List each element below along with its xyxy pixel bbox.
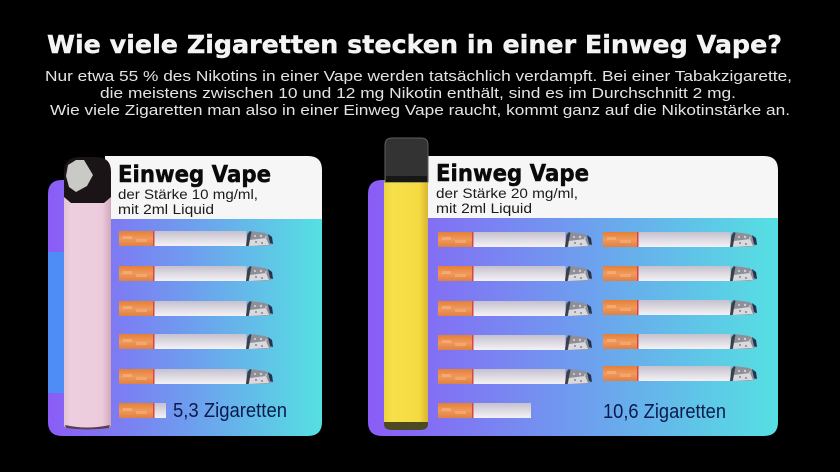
value label: 5,3 Zigaretten [173,400,287,422]
icon: yellow disposable vape [384,138,428,430]
panel subtitle: mit 2ml Liquid [118,202,214,217]
panel background [368,180,778,436]
panel subtitle: der Stärke 10 mg/ml, [118,187,258,202]
panel subtitle [436,186,578,216]
blue strip [48,252,66,393]
value label: 10,6 Zigaretten [603,401,726,423]
cigarettes: 5.3 [119,231,273,418]
white header [425,156,778,218]
panel heading: Einweg Vape [436,161,589,187]
title: Wie viele Zigaretten stecken in einer Einweg Vape? [47,30,782,59]
panel background [48,180,322,436]
white header [105,156,322,219]
intro text: Nur etwa 55 % des Nikotins in einer Vape werden tatsächlich verdampft. Bei einer Tabakzigarette, [45,69,792,85]
cigarettes: right column [603,232,757,381]
panel subtitle [118,187,258,217]
panel: 20 mg/ml vape [368,138,778,436]
panel subtitle: der Stärke 20 mg/ml, [436,186,578,201]
intro text: die meistens zwischen 10 und 12 mg Nikotin enthält, sind es im Durchschnitt 2 mg. [100,86,736,102]
panel: 10 mg/ml vape [48,156,322,436]
icon: pink disposable vape [64,157,111,430]
panel subtitle: mit 2ml Liquid [436,201,532,216]
intro text [45,69,792,119]
cigarettes: left column [438,232,592,418]
intro text: Wie viele Zigaretten man also in einer Einweg Vape raucht, kommt ganz auf die Nikotinstärke an. [50,103,790,119]
panel heading: Einweg Vape [118,162,271,188]
